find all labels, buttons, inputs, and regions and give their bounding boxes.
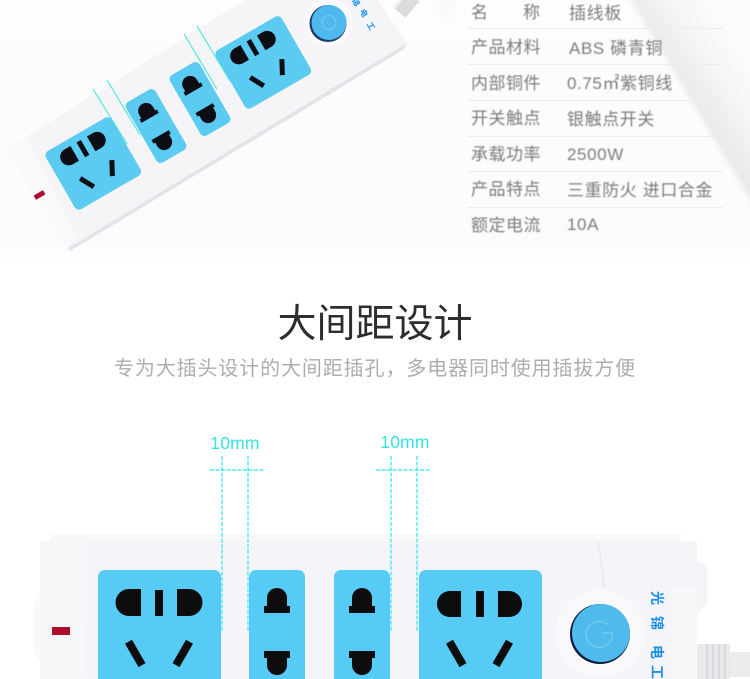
left large socket [98,570,221,679]
angled power strip [5,0,414,251]
value: contact: 银触点开关 [567,110,655,129]
value: name: 插线板 [569,4,622,23]
value: current: 10A [567,215,599,234]
row: power: 承载功率 [471,145,541,164]
row: name: 名称 [471,3,575,22]
row: material: 产品材料 [471,38,541,57]
angled strip cord [394,0,414,13]
power cord [697,644,750,679]
strip body [40,534,697,679]
label: left 10mm: 10mm [210,433,260,453]
spacing markers: right 10mm [376,456,431,632]
angled strip body [5,0,407,248]
row: current: 额定电流 [471,216,541,235]
spacing markers: left 10mm [210,456,264,632]
brand text: 电 [649,645,665,659]
end cap [697,560,707,613]
angled right socket [214,14,313,110]
angled dimension lines [93,26,230,144]
angled middle socket 2 [168,60,232,138]
angled power switch [305,0,353,46]
row: features: 产品特点 [471,180,541,199]
middle socket 1 [249,570,305,679]
row: contact: 开关触点 [471,109,541,128]
indicator light [52,627,70,635]
brand text: 锦 [649,616,665,630]
row: copper: 内部铜件 [471,74,541,93]
value: power: 2500W [567,145,624,164]
value: features: 三重防火 进口合金 [567,181,713,200]
heading: 大间距设计 [277,303,472,346]
angled strip shadow edge [68,43,407,251]
power switch [556,541,644,677]
angled brand text: 工 [365,21,376,32]
brand text: 光 [649,591,665,605]
right large socket [419,570,542,679]
subheading: 专为大插头设计的大间距插孔，多电器同时使用插拔方便 [114,358,636,380]
value: material: ABS 磷青铜 [569,39,663,58]
brand text: 工 [649,665,665,679]
angled middle socket 1 [124,87,188,165]
middle socket 2 [334,570,390,679]
label: right 10mm: 10mm [380,432,430,452]
front-view power strip [33,534,750,679]
angled brand text [350,0,376,32]
top background [0,0,750,262]
brand text [649,591,665,679]
value: copper: 0.75㎡紫铜线 [567,74,673,93]
angled left socket [44,115,143,211]
indicator light [33,190,46,200]
angled brand text: 电 [358,7,370,19]
